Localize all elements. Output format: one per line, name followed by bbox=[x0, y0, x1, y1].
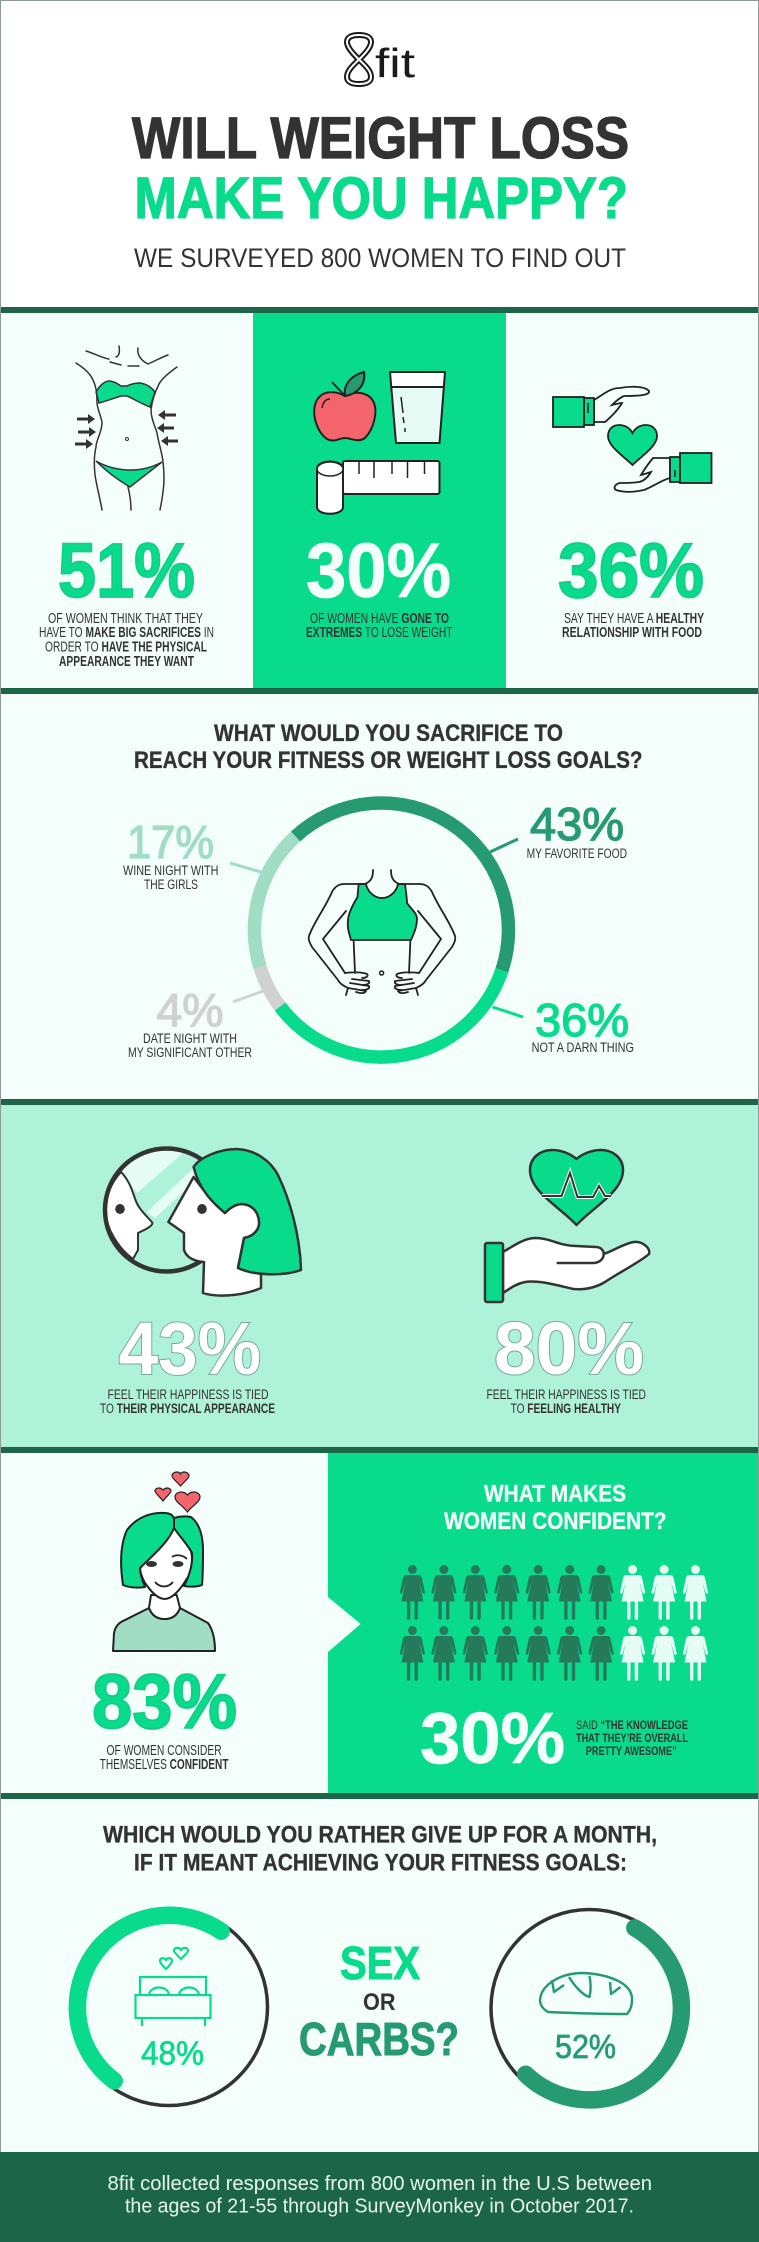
icon: hearts bbox=[155, 1472, 200, 1512]
text: 80% caption: FEEL THEIR HAPPINESS IS TIED bbox=[486, 1387, 646, 1402]
logo: 8fit bbox=[347, 35, 416, 86]
stat: 80%: 80% bbox=[494, 1307, 644, 1390]
chart: donut of sacrifices bbox=[254, 803, 508, 1057]
icon: torso in sports bra bbox=[309, 870, 455, 995]
icon: hands and heart bbox=[553, 387, 712, 492]
stat: 43%: 43% bbox=[119, 1307, 261, 1390]
text: 51% caption: APPEARANCE THEY WANT bbox=[59, 654, 194, 670]
text: 36% caption: RELATIONSHIP WITH FOOD bbox=[562, 625, 702, 641]
callout: 4% date night: MY SIGNIFICANT OTHER bbox=[128, 1045, 252, 1060]
footer: the ages of 21-55 through SurveyMonkey in October 2017. bbox=[125, 2196, 634, 2218]
text: sex or carbs: SEX bbox=[340, 1937, 420, 1989]
callout: 4% date night: 4% bbox=[156, 984, 224, 1036]
icon: glass of water bbox=[390, 372, 445, 443]
chart: sex ring 48% bbox=[70, 1908, 268, 2106]
chart: carbs ring 52% bbox=[491, 1910, 688, 2106]
icon: body with arrows bbox=[75, 346, 178, 510]
heading: WHAT MAKES bbox=[484, 1480, 626, 1508]
heading: WOMEN CONFIDENT? bbox=[444, 1508, 666, 1535]
title line 2: MAKE YOU HAPPY? bbox=[134, 166, 628, 231]
text: sex or carbs: OR bbox=[363, 1989, 396, 2016]
panel: happiness bbox=[0, 1105, 759, 1447]
text: 30% caption: OF WOMEN HAVE GONE TO bbox=[310, 611, 449, 627]
stat: 30%: 30% bbox=[420, 1699, 565, 1779]
heading: REACH YOUR FITNESS OR WEIGHT LOSS GOALS? bbox=[134, 747, 642, 774]
text: sex or carbs bbox=[299, 1937, 459, 2065]
stat: 52%: 52% bbox=[555, 2028, 616, 2065]
text: 36% caption bbox=[562, 611, 704, 641]
text: 80% caption bbox=[486, 1387, 646, 1416]
text: 36% caption: SAY THEY HAVE A HEALTHY bbox=[564, 611, 704, 627]
panel: 30 percent extremes bbox=[253, 313, 506, 688]
text: 30% caption: PRETTY AWESOME” bbox=[586, 1744, 677, 1758]
panel: what makes women confident bbox=[328, 1453, 759, 1793]
heading bbox=[103, 1822, 657, 1876]
callout: 36% not a darn thing bbox=[492, 994, 634, 1055]
text: 51% caption: OF WOMEN THINK THAT THEY bbox=[48, 611, 203, 627]
text: 30% caption bbox=[576, 1718, 688, 1758]
arrow notch bbox=[328, 1597, 361, 1652]
callout: 4% date night: DATE NIGHT WITH bbox=[143, 1031, 237, 1046]
title line 1: WILL WEIGHT LOSS bbox=[132, 106, 629, 171]
callout: 4% date night bbox=[128, 984, 263, 1060]
icon: bread loaf bbox=[540, 1973, 632, 2014]
panel: 36 percent healthy relationship bbox=[506, 313, 759, 688]
callout: 17% wine night: WINE NIGHT WITH bbox=[123, 863, 218, 878]
callout: 43% my favorite food: MY FAVORITE FOOD bbox=[527, 846, 627, 861]
callout: 36% not a darn thing: 36% bbox=[535, 994, 629, 1046]
chart: pictogram of women, 70 percent dark and 30 percent light bbox=[400, 1565, 708, 1681]
text: 80% caption: TO FEELING HEALTHY bbox=[511, 1401, 621, 1416]
text: 30% caption bbox=[306, 611, 453, 641]
subtitle: WE SURVEYED 800 WOMEN TO FIND OUT bbox=[134, 243, 626, 273]
icon: woman facing mirror bbox=[104, 1148, 301, 1296]
text: sex or carbs: CARBS? bbox=[299, 2013, 459, 2065]
heading: WHAT WOULD YOU SACRIFICE TO bbox=[214, 720, 563, 747]
callout: 43% my favorite food bbox=[490, 798, 627, 861]
callout: 43% my favorite food: 43% bbox=[530, 798, 624, 850]
icon: bed with hearts bbox=[136, 1948, 210, 2026]
text: 83% caption bbox=[100, 1743, 229, 1773]
heading bbox=[444, 1480, 666, 1535]
logo: 8fit: fit bbox=[375, 40, 416, 86]
icon: heart with pulse over hand bbox=[485, 1150, 649, 1302]
panel: header bbox=[0, 0, 759, 307]
stat: 36%: 36% bbox=[558, 528, 704, 614]
icon: measuring tape bbox=[317, 461, 440, 514]
callout: 17% wine night bbox=[123, 816, 261, 892]
text: 83% caption: OF WOMEN CONSIDER bbox=[106, 1743, 222, 1759]
panel: sex or carbs bbox=[0, 1799, 759, 2152]
stat: 48%: 48% bbox=[141, 2034, 204, 2072]
text: 30% caption: THAT THEY’RE OVERALL bbox=[576, 1731, 688, 1745]
text: 30% caption: SAID “THE KNOWLEDGE bbox=[576, 1718, 688, 1732]
panel: 51 percent sacrifices bbox=[0, 313, 253, 688]
text: 51% caption: ORDER TO HAVE THE PHYSICAL bbox=[45, 640, 207, 656]
panel: confident women bbox=[0, 1453, 759, 1793]
panel: what would you sacrifice bbox=[0, 694, 759, 1099]
text: 83% caption: THEMSELVES CONFIDENT bbox=[100, 1757, 229, 1773]
text: 51% caption bbox=[39, 611, 214, 670]
footer bbox=[0, 2152, 759, 2242]
callout: 36% not a darn thing: NOT A DARN THING bbox=[532, 1040, 634, 1055]
text: 51% caption: HAVE TO MAKE BIG SACRIFICES IN bbox=[39, 625, 214, 641]
text: 43% caption: TO THEIR PHYSICAL APPEARANCE bbox=[100, 1401, 275, 1416]
text: 43% caption: FEEL THEIR HAPPINESS IS TIED bbox=[108, 1387, 269, 1402]
text: 43% caption bbox=[100, 1387, 275, 1416]
callout: 17% wine night: 17% bbox=[127, 816, 214, 868]
stat: 30%: 30% bbox=[306, 528, 451, 614]
callout: 17% wine night: THE GIRLS bbox=[144, 877, 198, 892]
stat: 51%: 51% bbox=[58, 528, 195, 614]
text: 30% caption: EXTREMES TO LOSE WEIGHT bbox=[306, 625, 453, 641]
heading bbox=[134, 720, 642, 774]
heading: WHICH WOULD YOU RATHER GIVE UP FOR A MONTH, bbox=[103, 1822, 657, 1848]
icon: apple bbox=[314, 372, 375, 441]
footer: 8fit collected responses from 800 women in the U.S between bbox=[108, 2173, 652, 2195]
stat: 83%: 83% bbox=[92, 1659, 237, 1745]
icon: smiling woman bbox=[113, 1513, 215, 1651]
heading: IF IT MEANT ACHIEVING YOUR FITNESS GOALS: bbox=[134, 1850, 627, 1876]
